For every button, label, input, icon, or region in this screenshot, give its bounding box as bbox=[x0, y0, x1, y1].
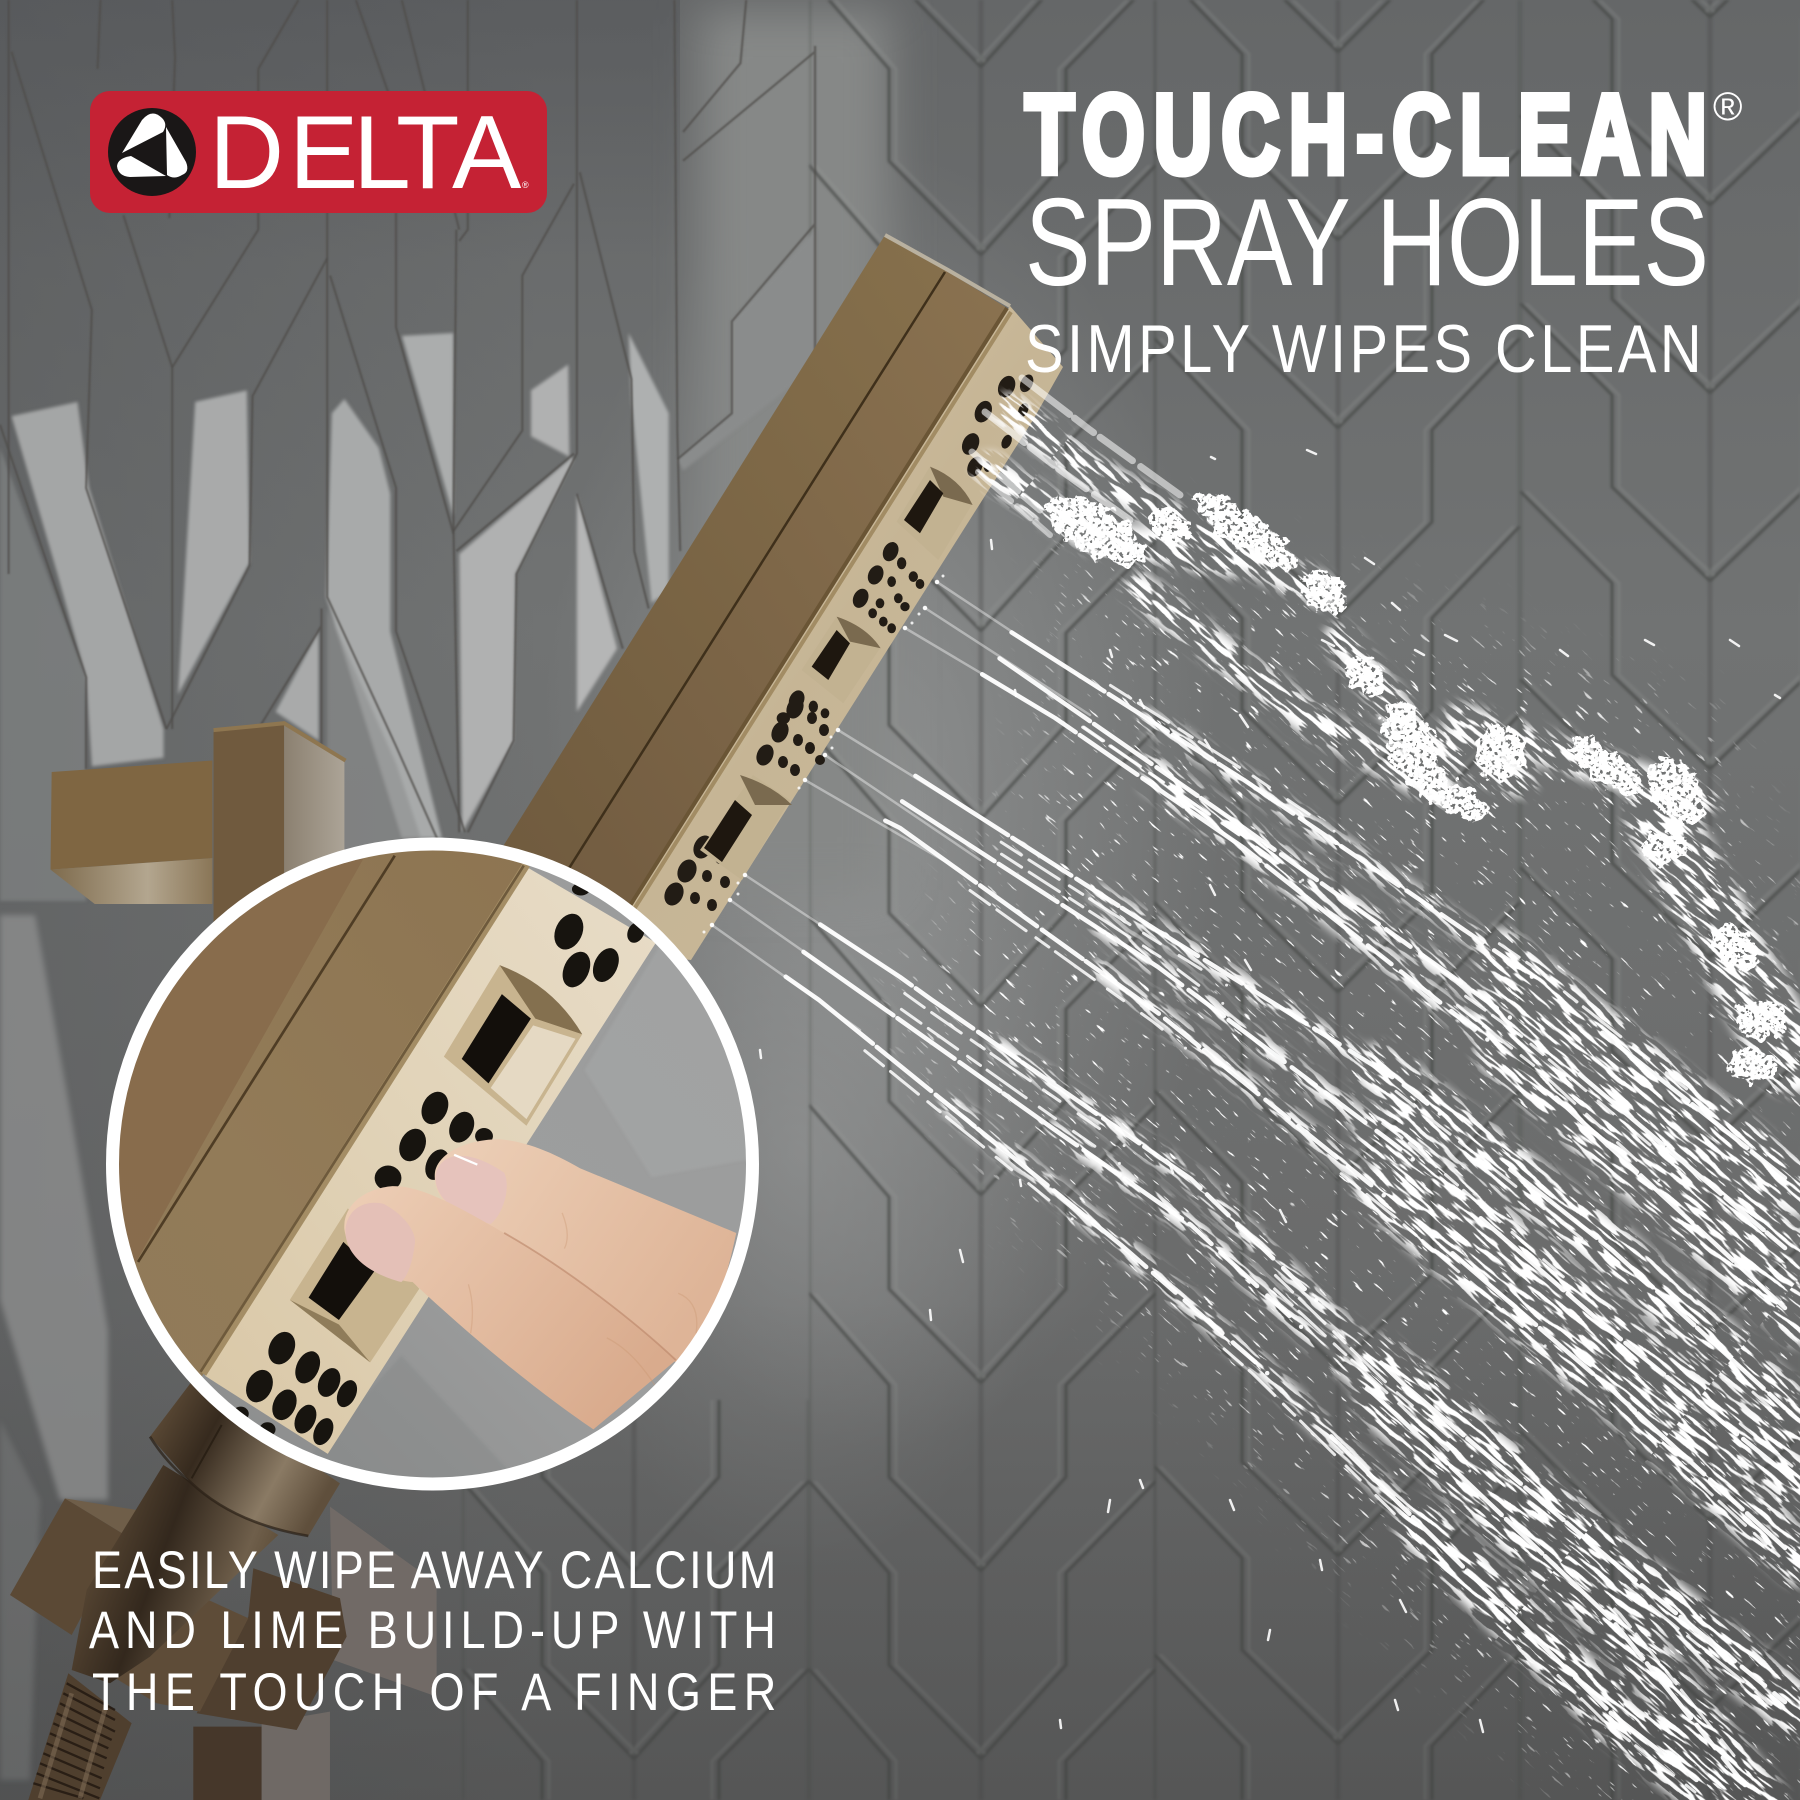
bottom caption bbox=[89, 1541, 776, 1722]
lower finger bbox=[344, 1186, 697, 1429]
spray nozzles and slots, detailed bbox=[777, 372, 1036, 724]
magnified cream spray face bbox=[205, 867, 656, 1454]
water spray: transparent jets near nozzles bbox=[712, 582, 1100, 1030]
upper fingernail bbox=[436, 1156, 507, 1224]
light tile panel beside head bbox=[700, 10, 890, 890]
collar bbox=[150, 1382, 340, 1536]
Delta logo badge: ® bbox=[522, 180, 529, 190]
lower fingernail bbox=[346, 1203, 415, 1282]
water spray: top nozzles jets bbox=[972, 378, 1180, 535]
slide bar left face bbox=[214, 724, 284, 976]
magnified spray holes bbox=[233, 883, 648, 1448]
magnified slots bbox=[444, 965, 582, 1126]
chevron tile lines: right of the wall bbox=[462, 0, 1800, 1800]
zoom circle callout: magnified spray face with fingers bbox=[35, 775, 817, 1557]
circle background bbox=[202, 865, 746, 1478]
lower nozzle clusters bbox=[661, 695, 829, 911]
water spray: sparse flying droplets bbox=[874, 478, 1800, 1800]
water spray: isolated droplets bbox=[760, 450, 1780, 1732]
bracket underside bbox=[51, 858, 212, 904]
Delta logo badge bbox=[90, 91, 547, 213]
wall bracket and slide bar, upper left bbox=[51, 723, 346, 976]
holder rear wedge bbox=[197, 1568, 347, 1730]
title block bbox=[1025, 72, 1742, 387]
hose bbox=[28, 1673, 132, 1800]
slide bar right face bbox=[284, 724, 344, 976]
neck bbox=[72, 1465, 278, 1683]
head middle face bbox=[549, 270, 1007, 950]
bracket front face bbox=[51, 761, 212, 870]
title line 3: SIMPLY WIPES CLEAN bbox=[1025, 312, 1702, 387]
title line 1: TOUCH-CLEAN bbox=[1025, 72, 1707, 197]
registered mark: ® bbox=[1713, 85, 1742, 129]
head left face bbox=[482, 235, 945, 900]
lower slide bar, pale section bbox=[330, 1507, 437, 1697]
water spray: dense streak speckle bbox=[934, 386, 1800, 1800]
hose, holder and lower slide bar bbox=[10, 1382, 437, 1800]
head cream spray face bbox=[602, 306, 1063, 960]
magnified bronze face bbox=[119, 850, 522, 1376]
bottom caption: AND LIME BUILD-UP WITH bbox=[89, 1601, 776, 1660]
bottom caption: THE TOUCH OF A FINGER bbox=[92, 1663, 776, 1722]
bottom caption: EASILY WIPE AWAY CALCIUM bbox=[92, 1541, 776, 1600]
holder left block bbox=[10, 1498, 125, 1635]
water spray: bright droplet blobs bbox=[1035, 480, 1784, 1082]
white circle ring bbox=[112, 844, 752, 1484]
hand shower head bbox=[482, 235, 1063, 960]
upper finger bbox=[435, 1139, 736, 1362]
logo mark bbox=[108, 108, 196, 196]
lower-left light tiles bbox=[0, 915, 108, 1780]
water spray: streaming jets bbox=[704, 576, 1792, 1792]
logo wordmark: DELTA bbox=[209, 95, 522, 211]
third slot bbox=[700, 775, 792, 880]
background: glossy leaf tiles, upper left bbox=[0, 0, 815, 901]
lower slide bar bbox=[193, 1727, 262, 1800]
holder front block bbox=[80, 1590, 248, 1712]
